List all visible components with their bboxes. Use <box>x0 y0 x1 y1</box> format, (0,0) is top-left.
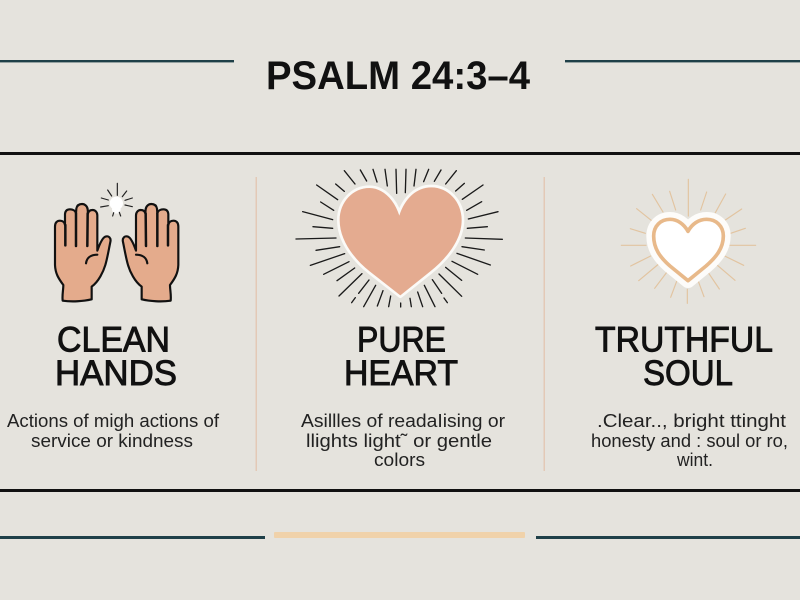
text: pure heart description <box>301 411 505 470</box>
text: truthful soul description: wint. <box>676 450 713 470</box>
text: truthful soul description <box>591 411 788 470</box>
icon: radiant heart <box>296 169 502 307</box>
heading: clean hands: HANDS <box>55 354 177 393</box>
text: pure heart description: colors <box>374 450 425 470</box>
heading: pure heart: HEART <box>344 354 458 393</box>
text: clean hands description: service or kindness <box>31 431 193 451</box>
panel: clean hands <box>7 183 220 451</box>
heading: clean hands: CLEAN <box>57 320 170 360</box>
heading: truthful soul: TRUTHFUL <box>595 320 773 360</box>
footer accent bar <box>274 532 525 538</box>
text: pure heart description: llights light˜ or gentle <box>306 431 492 451</box>
panel: truthful soul <box>591 179 788 470</box>
text: clean hands description <box>7 411 220 451</box>
text: truthful soul description: .Clear.., bright ttinght <box>597 411 786 431</box>
heading: pure heart: PURE <box>357 320 446 360</box>
heading: clean hands <box>55 320 177 393</box>
heading: pure heart <box>344 320 458 393</box>
text: pure heart description: Asillles of readaIising or <box>301 411 505 431</box>
heading: truthful soul: SOUL <box>643 354 733 393</box>
title: PSALM 24:3–4 <box>266 54 531 98</box>
icon: outlined heart with rays <box>621 179 756 303</box>
heading: truthful soul <box>595 320 773 393</box>
icon: raised hands with spark <box>55 183 178 301</box>
text: clean hands description: Actions of migh actions of <box>7 411 220 431</box>
panel: pure heart <box>296 169 505 470</box>
text: truthful soul description: honesty and : soul or ro, <box>591 431 788 451</box>
